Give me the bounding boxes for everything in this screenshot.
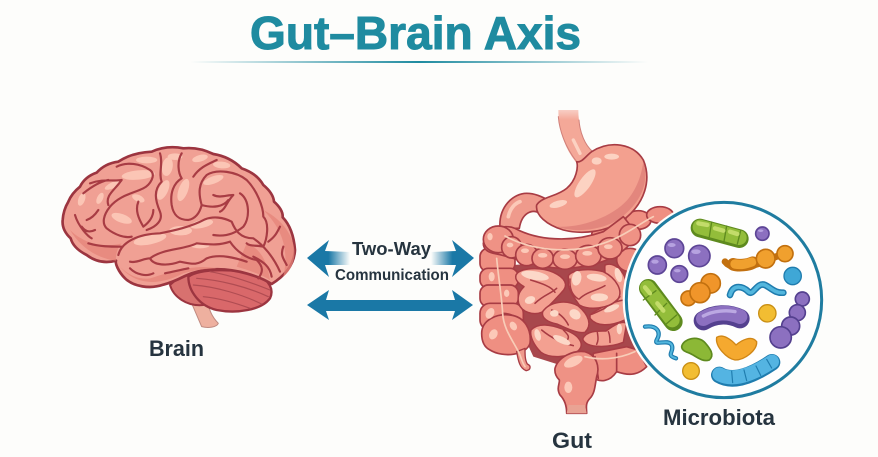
microbe: orange cluster xyxy=(681,274,720,306)
label: two-way communication: Communication xyxy=(335,267,449,284)
colon band xyxy=(505,217,653,250)
microbe: yellow ball lower xyxy=(683,363,699,379)
panel: microbiota circle xyxy=(623,199,825,401)
rectum xyxy=(555,351,635,413)
microbe: green rod left xyxy=(643,287,677,325)
colon: transverse xyxy=(483,217,641,269)
microbe: green rod top xyxy=(698,222,741,244)
appendix and colon band xyxy=(497,258,530,371)
cerebrum sulci xyxy=(75,153,287,278)
cerebrum shading xyxy=(70,210,294,282)
microbe: blue squiggle xyxy=(645,326,676,358)
microbe: yellow ball xyxy=(759,305,776,322)
duodenum xyxy=(500,193,548,228)
cerebellum xyxy=(188,270,271,312)
icon: brain xyxy=(63,147,295,327)
microbe: purple balls xyxy=(648,227,769,282)
title: Gut–Brain Axis xyxy=(250,7,581,59)
label: brain: Brain xyxy=(149,336,204,361)
esophagus xyxy=(558,110,593,165)
colon: right side behind xyxy=(592,207,673,272)
microbe: blue ball xyxy=(784,267,801,285)
cerebrum highlights xyxy=(76,153,231,248)
label: two-way communication: Two-Way xyxy=(352,239,431,259)
microbe: purple rod xyxy=(703,311,740,321)
brain cerebellum base xyxy=(170,273,207,305)
microbe: purple chain xyxy=(770,292,809,348)
intestine folds xyxy=(531,279,620,346)
icon: gut xyxy=(480,110,673,413)
microbe: orange chain xyxy=(725,246,793,268)
arrow: top two-way xyxy=(307,240,474,277)
arrow: bottom two-way xyxy=(307,290,473,320)
label: gut: Gut xyxy=(552,428,593,453)
label: two-way communication xyxy=(335,239,449,284)
brain stem xyxy=(192,302,218,327)
label: microbiota: Microbiota xyxy=(663,405,776,430)
microbe: blue wave xyxy=(730,285,783,295)
microbe: green bean xyxy=(682,338,712,361)
colon highlights xyxy=(484,272,519,341)
circle lens xyxy=(623,199,825,401)
title underline xyxy=(190,61,648,63)
intestine highlights xyxy=(520,267,623,347)
stomach xyxy=(537,145,647,232)
small intestine xyxy=(516,264,627,357)
microbe: orange heart xyxy=(717,336,757,360)
colon: sigmoid xyxy=(592,347,647,381)
intestine loops xyxy=(516,264,627,357)
gut backing xyxy=(513,257,643,377)
microbe: blue worm xyxy=(719,359,772,383)
colon: ascending xyxy=(480,248,530,355)
cerebrum xyxy=(63,147,295,287)
